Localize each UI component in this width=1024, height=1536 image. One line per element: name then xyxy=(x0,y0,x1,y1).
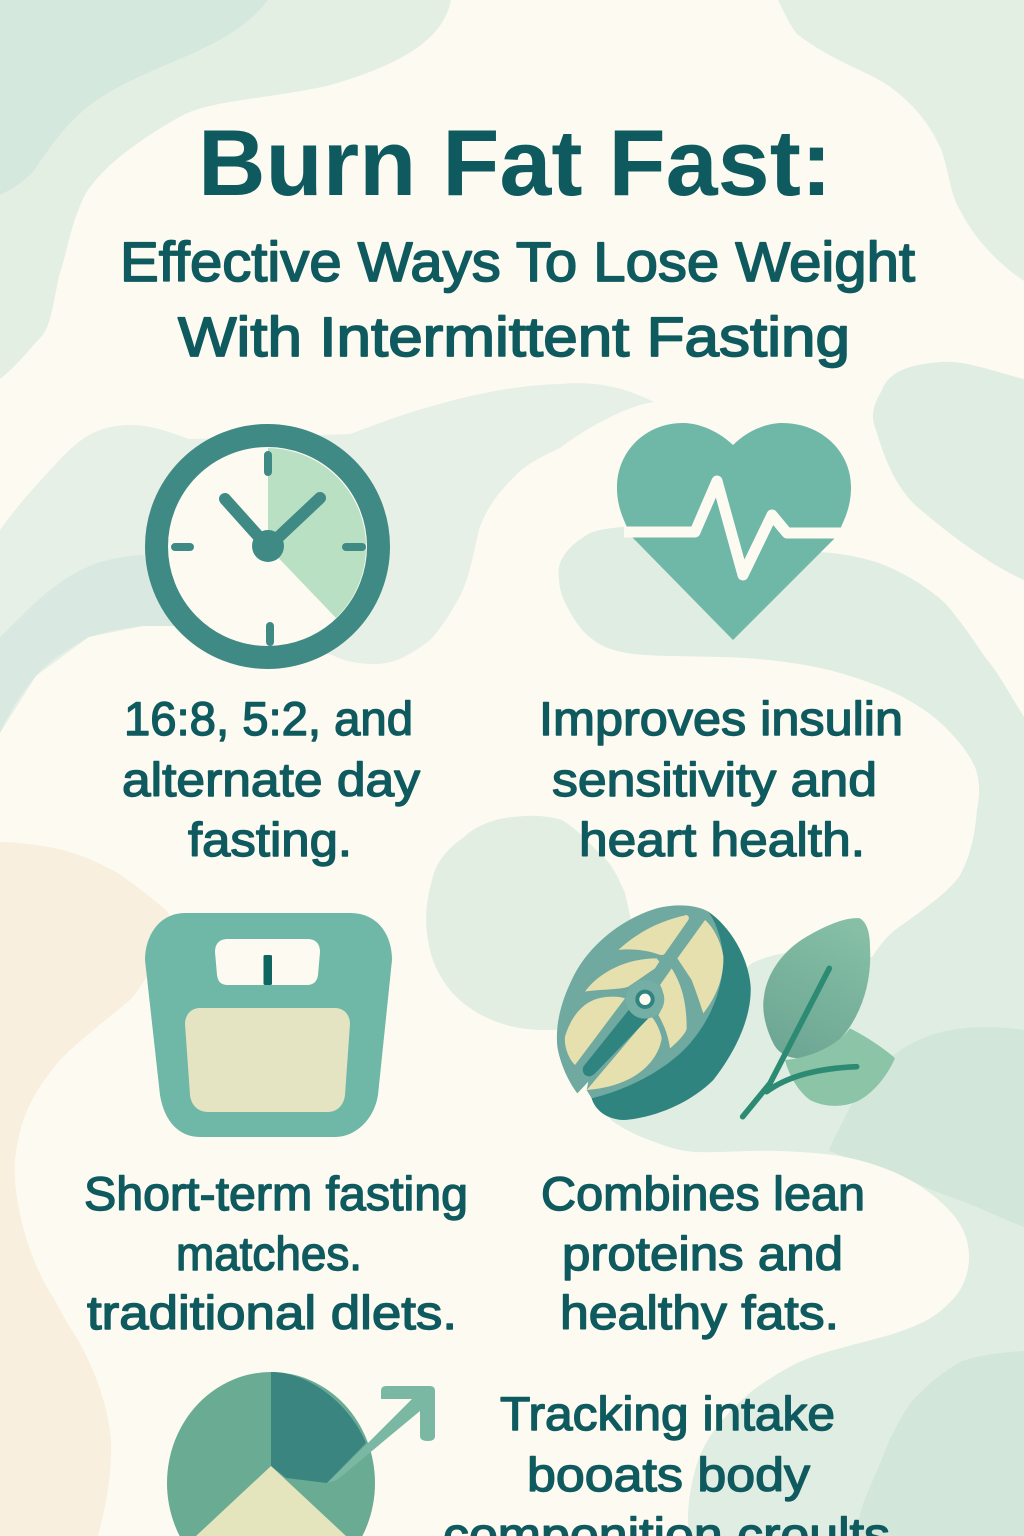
icon: clock xyxy=(156,436,378,658)
caption: insulin and heart health: sensitivity and xyxy=(552,753,877,806)
caption: short-term fasting: traditional dlets. xyxy=(87,1286,457,1339)
caption: lean proteins and healthy fats: healthy fats. xyxy=(560,1286,839,1339)
caption: lean proteins and healthy fats xyxy=(541,1167,865,1339)
icon: weighing scale xyxy=(145,913,392,1137)
icon: salmon steak and leaves xyxy=(557,905,895,1120)
caption: lean proteins and healthy fats: proteins and xyxy=(562,1227,843,1280)
caption: short-term fasting: matches. xyxy=(176,1227,362,1280)
caption: insulin and heart health: heart health. xyxy=(579,813,865,866)
subtitle xyxy=(120,230,915,368)
caption: fasting methods xyxy=(122,692,421,866)
caption: insulin and heart health xyxy=(539,692,903,866)
caption: fasting methods: alternate day xyxy=(122,753,421,806)
title: Burn Fat Fast: xyxy=(198,110,832,215)
caption: lean proteins and healthy fats: Combines lean xyxy=(541,1167,865,1220)
caption: short-term fasting: Short-term fasting xyxy=(84,1167,468,1220)
subtitle: Effective Ways To Lose Weight xyxy=(120,230,915,293)
caption: tracking intake: Tracking intake xyxy=(500,1387,835,1440)
caption: fasting methods: fasting. xyxy=(188,813,352,866)
caption: short-term fasting xyxy=(84,1167,468,1339)
caption: fasting methods: 16:8, 5:2, and xyxy=(124,692,413,745)
caption: tracking intake xyxy=(443,1387,890,1536)
caption: tracking intake: booats body xyxy=(527,1448,811,1501)
icon: heart with pulse xyxy=(617,423,851,640)
caption: insulin and heart health: Improves insulin xyxy=(539,692,903,745)
icon: pie chart with arrow xyxy=(167,1372,435,1536)
subtitle: With Intermittent Fasting xyxy=(178,305,850,368)
